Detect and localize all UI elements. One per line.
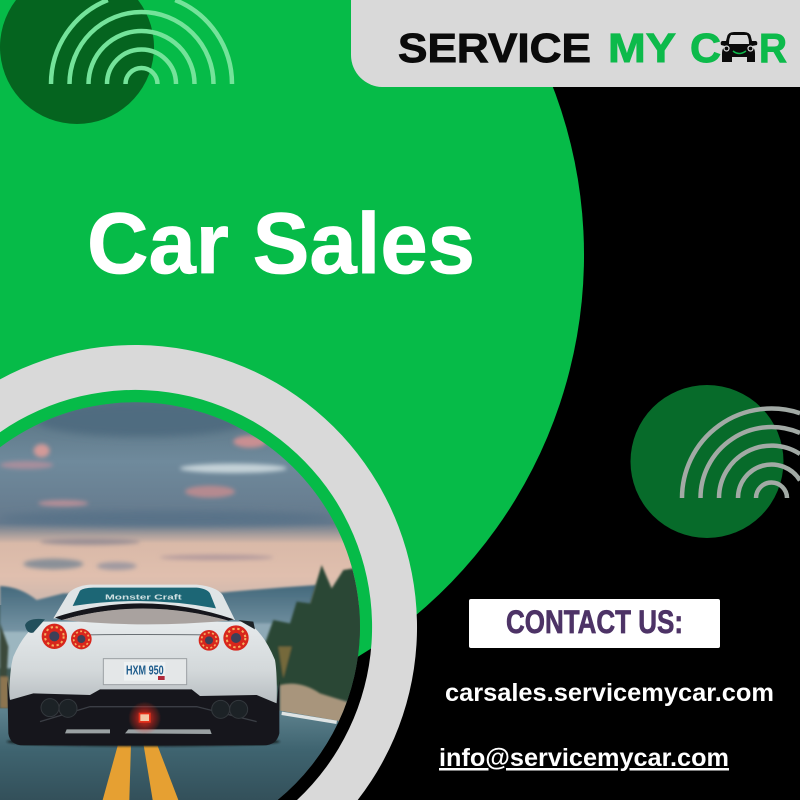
email: info@servicemycar.com — [439, 744, 729, 772]
car roof — [53, 585, 235, 620]
car rear window — [73, 588, 216, 608]
logo text: c: C — [690, 25, 721, 71]
photo hills and water — [0, 585, 317, 668]
car exhausts — [41, 699, 248, 718]
car spoiler — [55, 603, 234, 621]
car body — [9, 622, 277, 703]
logo text: service: SERVICE — [398, 25, 591, 71]
windshield lettering: Monster Craft — [105, 593, 183, 602]
car lower bumper — [7, 680, 279, 745]
license plate: HXM 950 — [126, 664, 164, 678]
car trunk line — [80, 633, 213, 636]
icon: concentric arcs top left — [51, 0, 232, 84]
contact us button: CONTACT US: — [506, 604, 683, 640]
photo car — [7, 585, 280, 746]
big green circle — [0, 0, 584, 725]
photo roadside — [279, 682, 347, 724]
decorative circle right — [630, 385, 784, 538]
logo banner — [351, 0, 800, 87]
photo road — [0, 708, 362, 800]
photo yellow road lines — [103, 743, 178, 800]
title: Car Sales — [87, 196, 475, 292]
gray ring — [0, 345, 417, 800]
photo trees — [0, 560, 362, 708]
photo: car on the road — [0, 400, 362, 800]
license plate — [124, 662, 165, 681]
logo text: my: MY — [608, 25, 676, 71]
contact us button — [469, 599, 720, 648]
icon: smiling car — [721, 32, 757, 62]
license plate recess — [103, 659, 187, 685]
car mirrors — [25, 619, 45, 633]
photo base — [0, 560, 362, 800]
car shadow — [7, 737, 280, 746]
car splitter — [65, 729, 212, 734]
website: carsales.servicemycar.com — [445, 679, 774, 707]
icon: concentric arcs right — [682, 409, 800, 498]
car tail lights — [42, 624, 249, 651]
decorative circle top left — [0, 0, 154, 124]
photo road edge line — [282, 713, 337, 722]
photo sky — [0, 400, 362, 605]
car rear brake light — [128, 701, 161, 735]
logo text: r: R — [759, 25, 787, 71]
